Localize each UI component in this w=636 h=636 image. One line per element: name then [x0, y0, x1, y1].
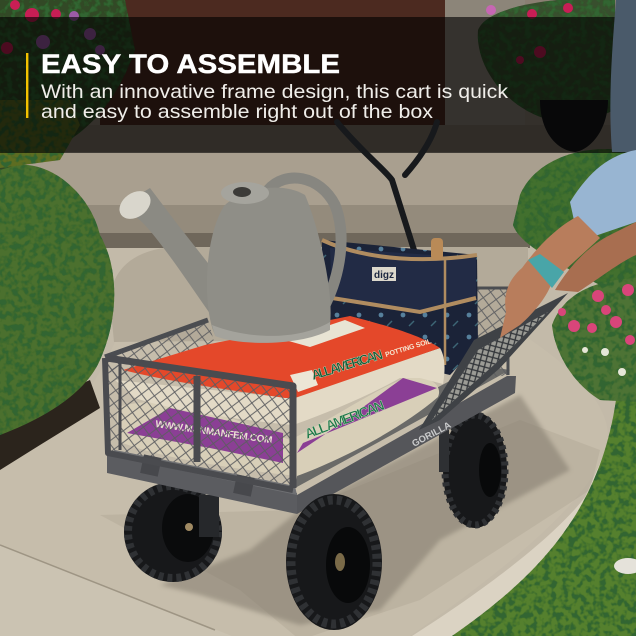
title block	[26, 49, 508, 123]
walkway corner object	[614, 558, 636, 574]
smart watch	[528, 254, 564, 288]
cart side rail and bed	[107, 376, 516, 514]
left front wheel	[124, 482, 222, 582]
cart mesh back walls	[105, 288, 508, 380]
brand on rail: GORILLA	[410, 420, 453, 450]
forearm and hand front	[500, 216, 600, 338]
front rack frame	[105, 358, 293, 490]
watering can	[114, 178, 341, 343]
tote bag	[322, 238, 478, 375]
grass	[452, 395, 636, 636]
red bag product text: POTTING SOIL	[385, 338, 433, 359]
lifted side gate	[419, 293, 568, 430]
red soil bag	[115, 316, 445, 425]
front rack mesh	[107, 360, 293, 490]
right hedge	[513, 149, 636, 285]
planter flowers top right	[478, 0, 615, 152]
dark title band overlay	[0, 17, 636, 153]
purple bag url text: WWW.MANMANFEM.COM	[155, 419, 273, 446]
rear wheel	[439, 412, 507, 528]
purple bag brand text: ALL AMERICAN	[302, 397, 386, 442]
front wheel	[286, 494, 382, 630]
ground shadow under cart	[160, 395, 570, 625]
planter flowers top left	[0, 0, 135, 170]
red bag brand text: ALL AMERICAN	[309, 347, 385, 383]
yellow accent bar	[26, 53, 28, 118]
purple soil bag	[117, 375, 439, 476]
heading: EASY TO ASSEMBLE	[41, 49, 340, 79]
cart bed mesh floor	[295, 365, 510, 488]
denim apron	[610, 0, 636, 152]
flower bed right	[552, 278, 636, 402]
tote label	[372, 267, 396, 281]
cart pull handle	[337, 122, 437, 250]
can handle	[268, 178, 341, 305]
forearm and hand rear	[555, 222, 636, 292]
description line one: With an innovative frame design, this cart is quick	[41, 81, 508, 103]
soil under left hedge	[0, 380, 100, 470]
walkway	[0, 338, 608, 636]
shirt sleeve	[570, 150, 636, 236]
tote label: digz	[374, 270, 394, 281]
description line two: and easy to assemble right out of the box	[41, 101, 433, 123]
can spout	[122, 188, 215, 318]
left hedge	[0, 165, 114, 435]
can body	[207, 188, 331, 342]
